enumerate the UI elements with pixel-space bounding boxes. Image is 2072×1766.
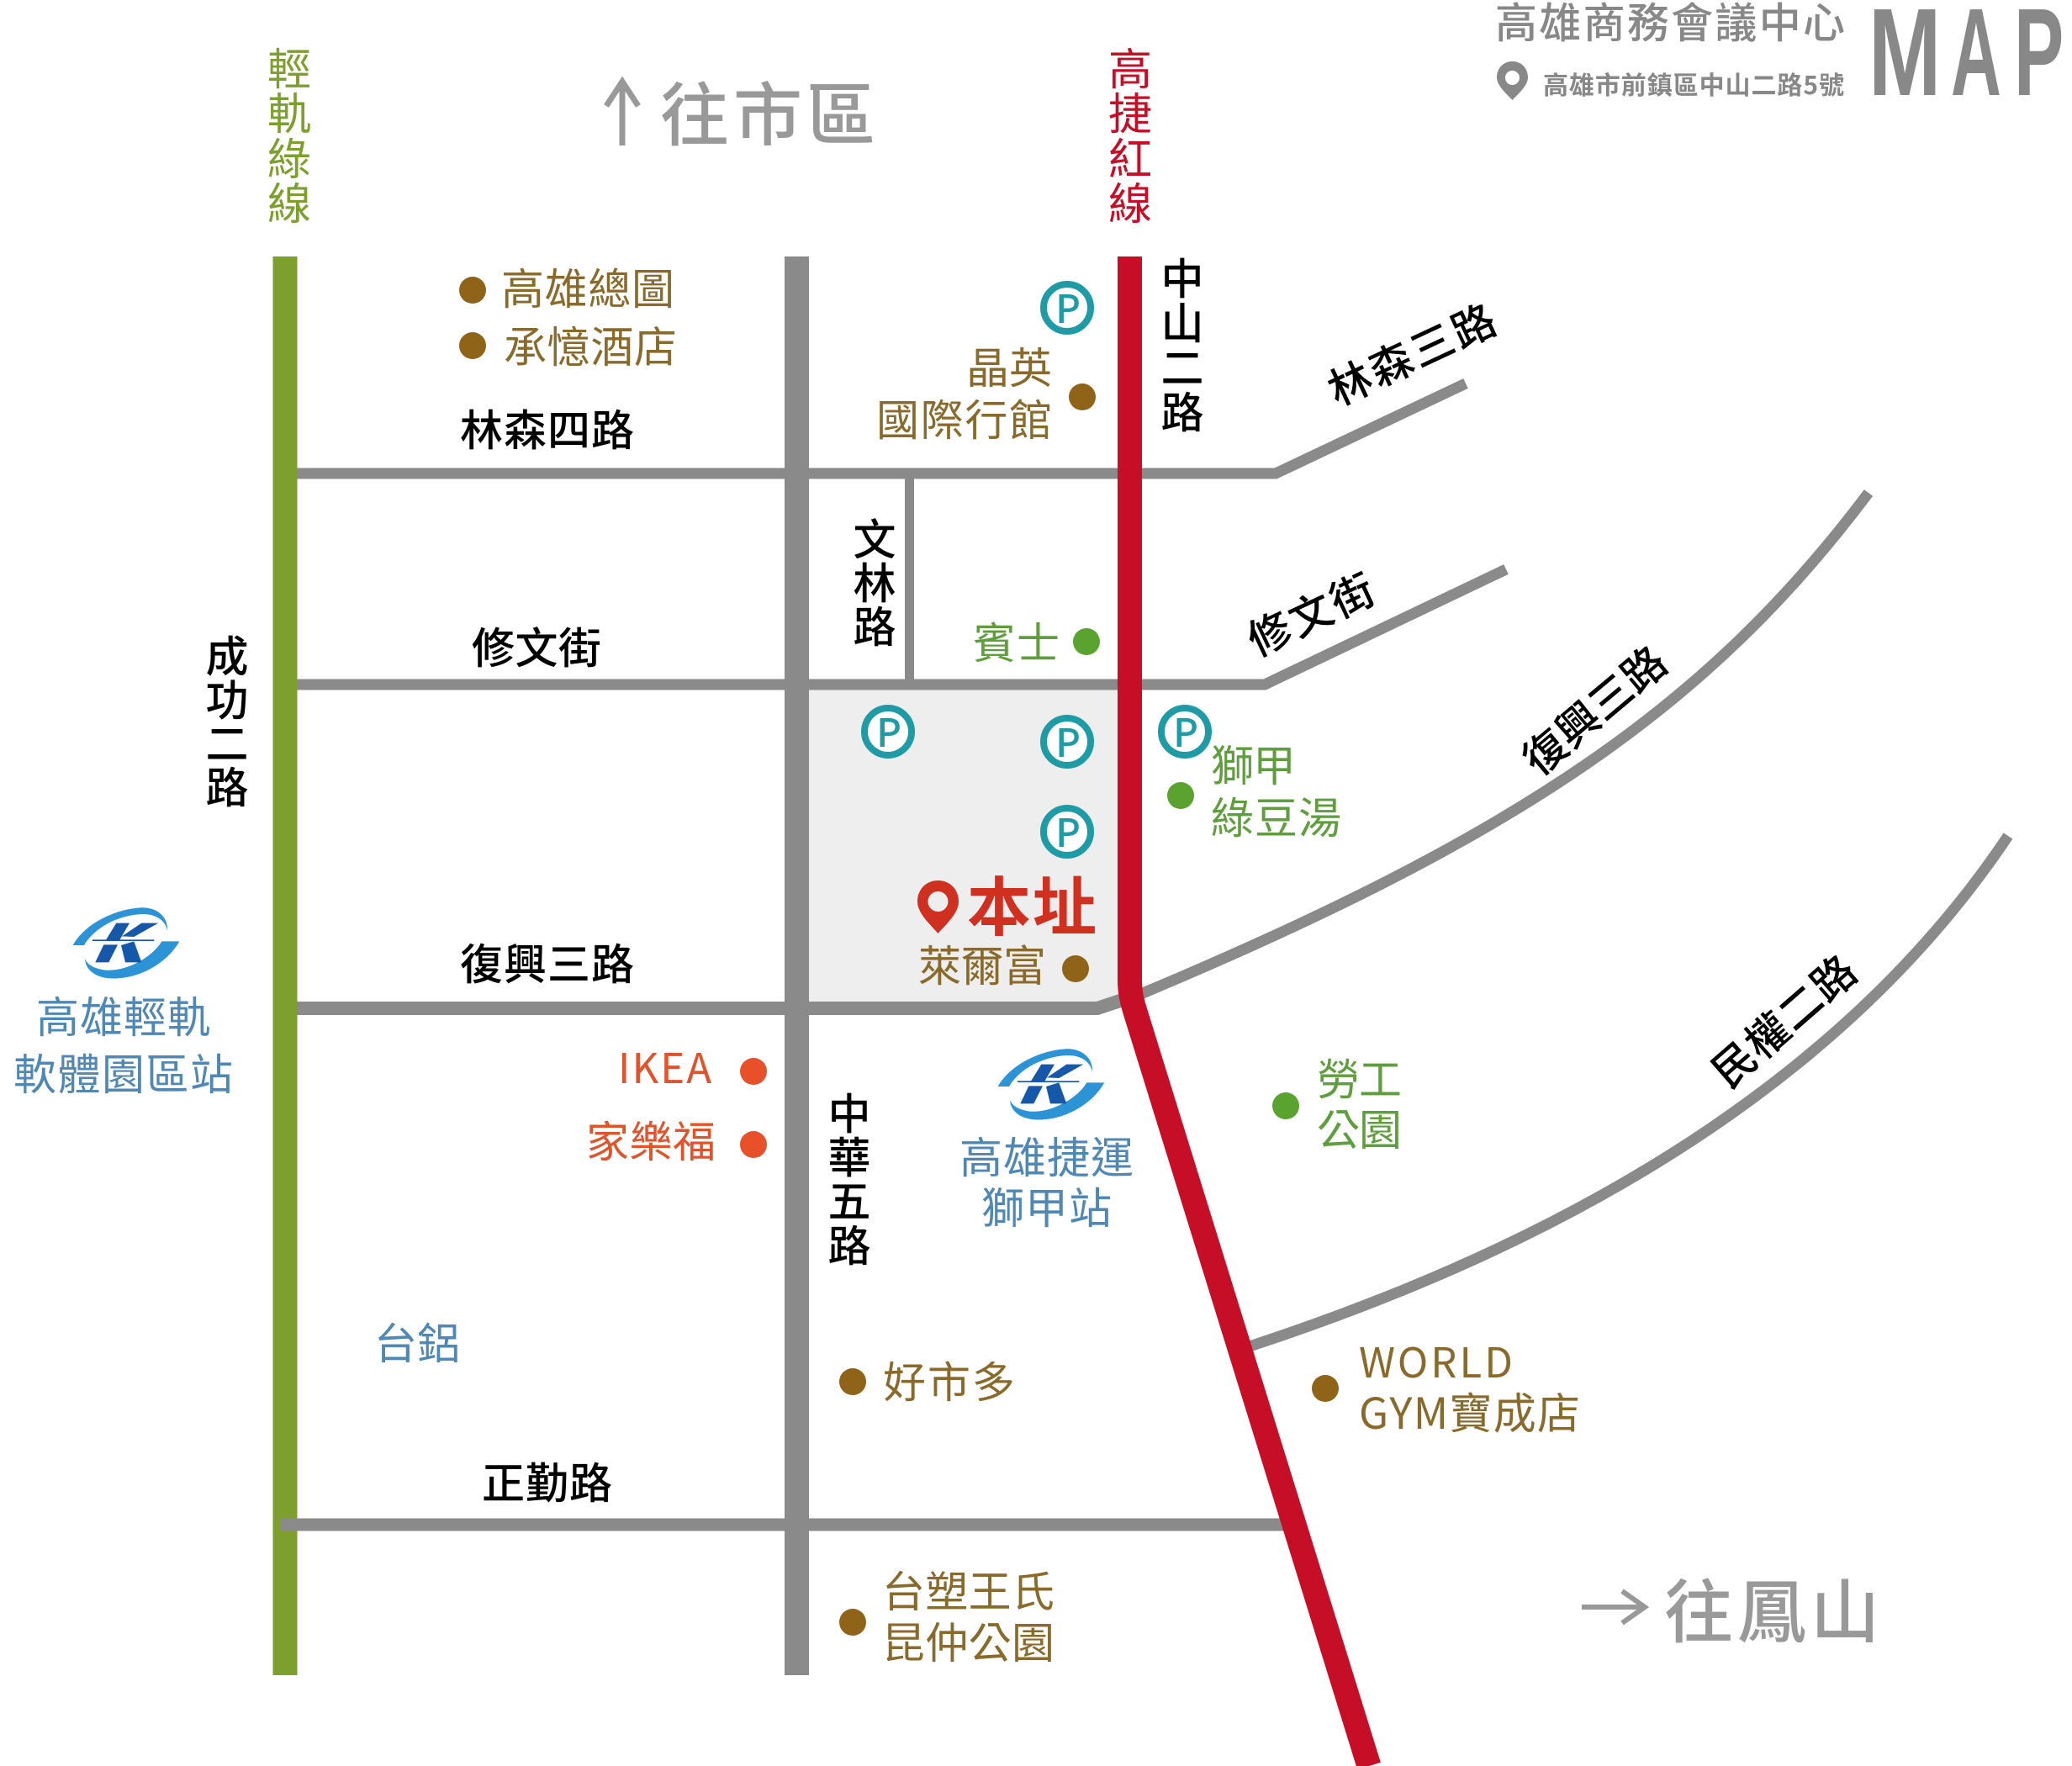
road label: 文林路: 文林路 — [853, 505, 896, 655]
road: 中華五路 — [785, 256, 809, 1675]
parking: east of red line — [1161, 703, 1208, 759]
name: 萊爾富 — [918, 932, 1046, 994]
name line 2: 綠豆湯 — [1211, 784, 1341, 846]
parking: centre block — [1044, 713, 1091, 769]
road: 文林路 — [905, 473, 914, 685]
landmark: 高雄總圖 — [459, 255, 674, 317]
name: 賓士 — [973, 609, 1060, 671]
road: 復興三路 east — [1135, 493, 1868, 997]
landmark: 勞工公園 — [1272, 1045, 1402, 1158]
dot — [1312, 1375, 1339, 1402]
landmark: 晶英國際行館 — [876, 334, 1096, 448]
dot — [1062, 955, 1089, 982]
landmark: 賓士 — [973, 609, 1100, 671]
dot — [740, 1058, 767, 1085]
road label: 中華五路: 中華五路 — [827, 1080, 871, 1274]
road network — [290, 256, 2008, 1675]
dot — [839, 1368, 866, 1395]
line 2: 獅甲站 — [981, 1174, 1112, 1236]
parking: east of red line: P — [1173, 703, 1198, 759]
road label: 林森三路: 林森三路 — [1316, 285, 1507, 418]
icon: MRT logo — [998, 1049, 1104, 1120]
parking: centre block: P — [1055, 713, 1081, 769]
icon: right arrow — [1582, 1591, 1645, 1623]
parking: north of 林森四路: P — [1055, 279, 1081, 335]
icon: address pin — [1497, 61, 1528, 100]
road label: 成功二路: 成功二路 — [205, 622, 249, 816]
road: 民權二路 — [1246, 836, 2008, 1348]
landmark: 台鋁: 台鋁 — [374, 1309, 460, 1372]
label: to Fengshan: 往鳳山 — [1664, 1557, 1879, 1657]
dot — [1272, 1092, 1299, 1119]
parking: west block: P — [876, 703, 901, 759]
road: 林森四路 — [290, 383, 1466, 473]
road label: 復興三路 west: 復興三路 — [460, 930, 634, 992]
venue marker: 本址 — [917, 856, 1097, 949]
landmark: 獅甲綠豆湯 — [1167, 732, 1341, 846]
MRT red line — [1130, 256, 1369, 1766]
label: MRT station — [959, 1124, 1134, 1236]
dot — [459, 277, 486, 304]
highlighted venue block — [803, 685, 1123, 1008]
icon: up arrow — [606, 82, 638, 145]
name line 2: 昆仲公園 — [882, 1609, 1054, 1671]
road label: 修文街 west: 修文街 — [472, 614, 601, 676]
name line 1: 台塑王氏 — [882, 1557, 1054, 1620]
dot — [1167, 782, 1194, 809]
icon: red pin — [917, 880, 959, 933]
dot — [1073, 628, 1100, 655]
name line 1: 獅甲 — [1211, 732, 1296, 794]
landmark: 台塑王氏昆仲公園 — [839, 1557, 1054, 1671]
parking: lower block: P — [1055, 803, 1081, 859]
landmark: 好市多 — [839, 1348, 1015, 1410]
name line 1: 晶英 — [966, 334, 1052, 396]
icon: light rail logo — [73, 907, 179, 979]
landmark: 家樂福 — [586, 1108, 767, 1170]
line 1: 高雄捷運 — [959, 1124, 1134, 1186]
label: MRT red line: 高捷紅線 — [1108, 34, 1152, 232]
name line 2: 公園 — [1317, 1096, 1402, 1158]
parking: lower block — [1044, 803, 1091, 859]
name: 高雄總圖 — [501, 255, 674, 317]
name line 2: GYM寶成店 — [1359, 1379, 1580, 1441]
name line 1: 勞工 — [1317, 1045, 1402, 1108]
landmark: 承憶酒店 — [459, 313, 677, 375]
address: 高雄市前鎮區中山二路5號 — [1543, 65, 1844, 102]
road label: 修文街 east: 修文街 — [1236, 554, 1386, 669]
road label: 民權二路: 民權二路 — [1696, 938, 1868, 1100]
name: 家樂福 — [586, 1108, 716, 1170]
label: light rail green line: 輕軌綠線 — [267, 34, 311, 232]
label: 本址 — [967, 856, 1097, 949]
name line 1: WORLD — [1359, 1330, 1513, 1390]
name: 承憶酒店 — [504, 313, 677, 375]
parking: west block — [864, 703, 912, 759]
name line 2: 國際行館 — [876, 386, 1052, 448]
road label: 林森四路: 林森四路 — [460, 396, 634, 458]
landmark: WORLD GYM — [1312, 1330, 1580, 1441]
heading: MAP — [1868, 0, 2064, 122]
name: IKEA — [618, 1036, 711, 1096]
road label: 中山二路: 中山二路 — [1160, 245, 1204, 441]
road label: 正勤路: 正勤路 — [482, 1449, 612, 1511]
line 2: 軟體園區站 — [13, 1040, 233, 1102]
parking: north of 林森四路 — [1044, 279, 1091, 335]
dot — [839, 1609, 866, 1636]
label: to city centre: 往市區 — [660, 60, 875, 160]
landmark: 萊爾富 — [918, 932, 1089, 994]
line 1: 高雄輕軌 — [36, 983, 210, 1045]
road: 復興三路 west — [290, 1000, 1123, 1008]
road label: 復興三路 east: 復興三路 — [1507, 629, 1678, 787]
dot — [740, 1131, 767, 1158]
label: light rail station — [13, 983, 233, 1102]
road: 修文街 — [291, 569, 1506, 685]
landmark: IKEA — [618, 1036, 767, 1096]
dot — [459, 332, 486, 359]
direction: to city centre — [606, 60, 875, 160]
dot — [1069, 383, 1096, 410]
light rail green line — [272, 256, 298, 1675]
direction: to Fengshan — [1582, 1557, 1879, 1657]
name: 好市多 — [883, 1348, 1015, 1410]
road: 正勤路 — [280, 1519, 1287, 1531]
